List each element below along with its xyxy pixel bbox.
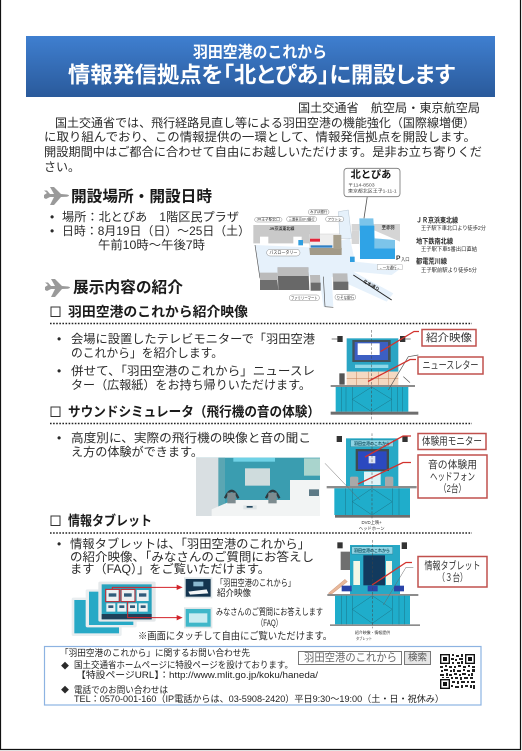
QR code xyxy=(440,654,475,689)
sound bullet: 高度別に、実際の飛行機の映像と音の聞こ xyxy=(71,431,311,445)
callout: tablet: 情報タブレット xyxy=(424,559,480,572)
access info: 王子駅前駅より徒歩5分 xyxy=(421,266,477,274)
access info: 王子駅下車北口より徒歩2分 xyxy=(421,224,486,232)
map: JR王子駅北口 xyxy=(257,217,280,222)
access info xyxy=(416,216,486,274)
title banner xyxy=(26,36,495,97)
search box: 羽田空港のこれから xyxy=(304,651,397,664)
tablet illustration xyxy=(72,582,183,636)
icon: plane xyxy=(45,279,70,297)
booth diagram: sound: 羽田空港のこれから xyxy=(354,440,390,446)
venue and dates list: 場所：北とぴあ 1階区民プラザ xyxy=(62,210,239,224)
map: P xyxy=(396,255,401,262)
contact details: ◆ xyxy=(61,686,69,694)
booth diagram: sound: DVD上映+ xyxy=(362,519,382,526)
callout: headphones: ヘッドフォン xyxy=(430,471,475,483)
tablet bullet: ます（FAQ）」をご覧いただけます。 xyxy=(70,561,270,576)
map: 入口 xyxy=(401,257,410,263)
access info: 都電荒川線 xyxy=(416,256,447,266)
venue and dates list xyxy=(50,210,250,252)
map: 北とぴあ xyxy=(351,169,391,181)
intro text: 開設期間中はご都合に合わせて自由にお越しいただけます。是非お立ち寄りくだ xyxy=(44,144,482,159)
search box xyxy=(298,651,430,664)
sound bullet: え方の体験ができます。 xyxy=(71,444,203,459)
booth diagram: sound: ヘッドホーン xyxy=(359,526,385,531)
callout: headphones: （2台） xyxy=(439,482,466,495)
intro text: さい。 xyxy=(44,160,80,174)
video bullets: 会場に設置したテレビモニターで「羽田空港 xyxy=(71,332,315,346)
contact details xyxy=(61,659,444,704)
sound bullet xyxy=(57,431,311,459)
search box: 検索 xyxy=(408,652,427,664)
subheading: video: 羽田空港のこれから紹介映像 xyxy=(68,304,249,320)
callout: monitor: 体験用モニター xyxy=(422,434,482,448)
contact details: ◆ xyxy=(61,662,69,670)
video bullets: • xyxy=(57,364,61,378)
callout: newsletter: ニュースレター xyxy=(422,360,478,372)
intro text: に取り組んでおり、この情報提供の一環として、情報発信拠点を開設します。 xyxy=(44,129,476,144)
intro text xyxy=(44,115,482,174)
callout: video xyxy=(380,330,476,352)
access info: 王子駅下車5番出口直結 xyxy=(421,245,477,253)
photo: sound booth xyxy=(196,458,320,516)
callout: headphones: 音の体験用 xyxy=(428,458,477,471)
video bullets: ター（広報紙）をお持ち帰りいただけます。 xyxy=(71,377,311,392)
callout: headphones xyxy=(358,455,487,498)
booth diagram: tablet: タブレット xyxy=(356,635,372,641)
booth diagram: tablet: 紹介映像・情報提供 xyxy=(355,629,390,635)
map: アウトレ xyxy=(328,216,342,221)
video bullets: のこれから」を紹介します。 xyxy=(71,346,223,360)
venue and dates list: • xyxy=(50,210,54,224)
map: りそな銀行 xyxy=(337,294,354,300)
callout: newsletter xyxy=(368,357,483,382)
icon: plane xyxy=(44,187,69,205)
sound bullet: • xyxy=(57,431,61,445)
venue and dates list: 午前10時～午後7時 xyxy=(98,237,205,252)
booth diagram: video xyxy=(331,330,418,420)
map: みずほ銀行 xyxy=(310,209,328,214)
map: ←一方通行→ xyxy=(379,264,400,270)
tablet bullet xyxy=(57,536,314,576)
heading: exhibition: 展示内容の紹介 xyxy=(73,278,183,296)
callout: tablet xyxy=(372,556,487,587)
tablet captions: みなさんのご質問にお答えします xyxy=(216,606,323,617)
map: JR京浜東北線 xyxy=(269,225,294,231)
tablet captions: （FAQ） xyxy=(257,618,282,628)
tablet bullet: の紹介映像、「みなさんのご質問にお答えし xyxy=(70,549,314,564)
contact details: 【特設ページURL】：http://www.mlit.go.jp/koku/haneda/ xyxy=(76,669,318,680)
access info: ＪＲ京浜東北線 xyxy=(416,216,458,224)
contact panel xyxy=(44,646,481,705)
contact details: 電話でのお問い合わせは xyxy=(74,684,168,695)
access info: 地下鉄南北線 xyxy=(416,236,453,246)
contact details: TEL：0570-001-160（IP電話からは、03-5908-2420）平日9:30～19:00（土・日・祝休み） xyxy=(74,693,444,704)
map: バスロータリー xyxy=(269,249,298,256)
tablet bullet: 情報タブレットは、「羽田空港のこれから」 xyxy=(70,536,310,551)
video bullets: • xyxy=(57,332,61,346)
tablet captions xyxy=(216,577,323,628)
title banner: 羽田空港のこれから xyxy=(193,42,327,62)
map xyxy=(253,168,410,307)
map: 東京都北区王子1-11-1 xyxy=(348,187,397,194)
map: ファミリーマート xyxy=(291,295,318,300)
booth diagram: tablet: 羽田空港のこれから xyxy=(354,547,390,553)
callout: monitor xyxy=(365,434,486,457)
booth diagram: tablet xyxy=(327,540,420,641)
map: 三菱東京UFJ銀行 xyxy=(289,216,315,221)
tablet thumbnails xyxy=(184,577,212,628)
venue and dates list: • xyxy=(50,224,54,238)
subheading: tablet: 情報タブレット xyxy=(68,512,152,528)
video bullets: 併せて、「羽田空港のこれから」ニュースレ xyxy=(71,364,315,378)
title banner: 情報発信拠点を「北とぴあ」に開設します xyxy=(68,62,455,88)
tablet bullet: • xyxy=(57,537,61,551)
issuer: 国土交通省 航空局・東京航空局 xyxy=(298,101,480,115)
booth diagram: sound xyxy=(325,433,417,531)
venue and dates list: 日時：8月19日（日）～25日（土） xyxy=(62,224,250,238)
subheading: sound simulator: サウンドシミュレータ（飛行機の音の体験） xyxy=(68,404,320,420)
contact heading: 「羽田空港のこれから」に関するお問い合わせ先 xyxy=(60,647,250,658)
tablet captions: 紹介映像 xyxy=(217,587,251,598)
map: 至赤羽 xyxy=(382,225,395,231)
callout: tablet: （３台） xyxy=(438,571,468,584)
video bullets xyxy=(57,332,315,392)
map: 北本通り xyxy=(362,278,381,293)
intro text: 国土交通省では、飛行経路見直し等による羽田空港の機能強化（国際線増便） xyxy=(55,115,475,130)
note: ※画面にタッチして自由にご覧いただけます。 xyxy=(138,630,332,642)
tablet captions: 「羽田空港のこれから」 xyxy=(216,577,295,588)
map: 〒114-8503 xyxy=(348,182,375,187)
callout: video: 紹介映像 xyxy=(426,331,473,344)
contact details: 国土交通省ホームページに特設ページを設けております。 xyxy=(74,659,293,670)
heading: venue and dates: 開設場所・開設日時 xyxy=(71,188,212,206)
